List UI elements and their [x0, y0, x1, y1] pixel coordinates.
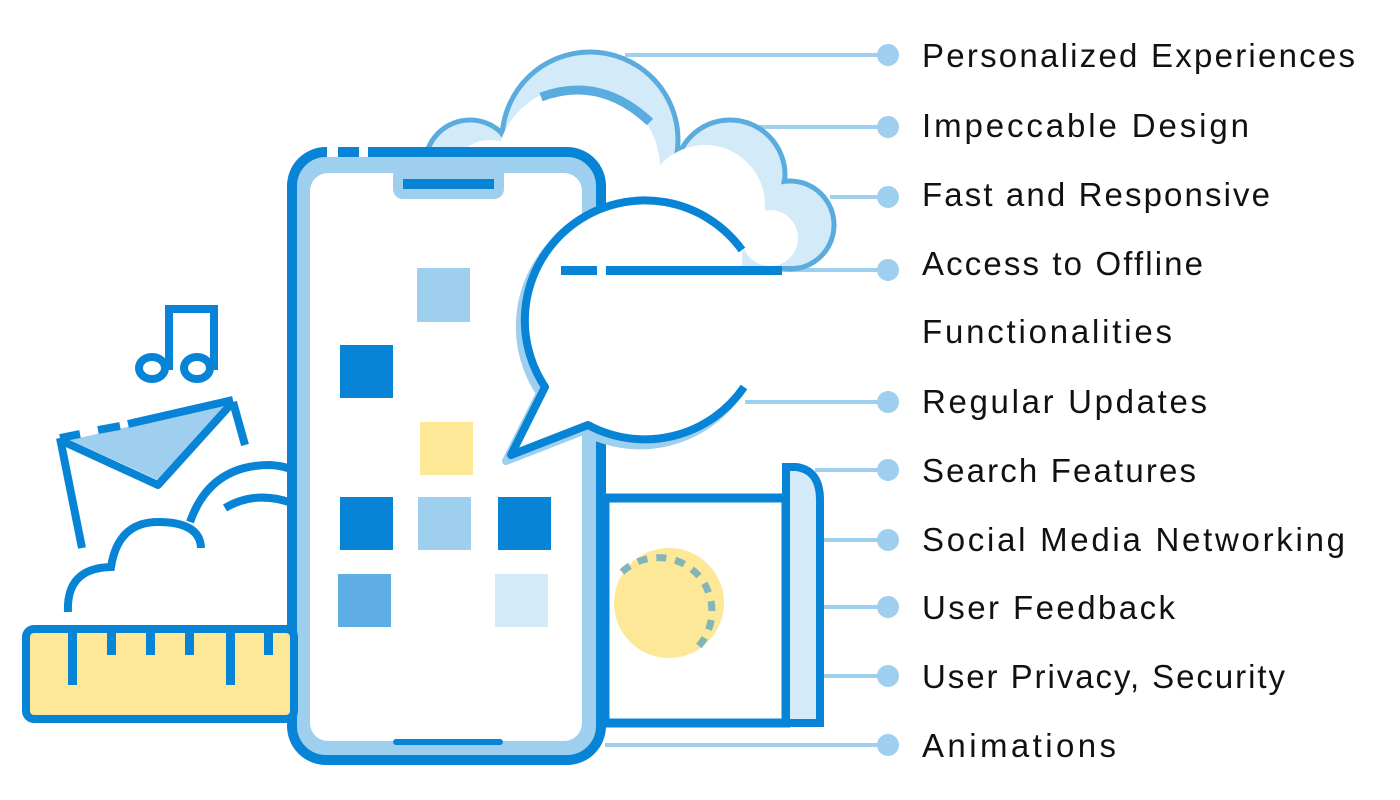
- feature list: Fast and Responsive: [922, 176, 1270, 213]
- feature list: Regular Updates: [922, 383, 1207, 420]
- small cloud: [68, 465, 292, 612]
- feature list: Social Media Networking: [922, 521, 1345, 558]
- feature list: Functionalities: [922, 313, 1172, 350]
- connector lines: [605, 55, 888, 745]
- laptop box: [605, 467, 820, 723]
- ruler: [26, 629, 294, 719]
- app squares: [338, 268, 551, 627]
- phone: [292, 145, 601, 760]
- feature list: User Privacy, Security: [922, 658, 1286, 695]
- feature list: Access to Offline: [922, 245, 1203, 282]
- feature list: Impeccable Design: [922, 107, 1249, 144]
- speech bubble: [506, 200, 782, 461]
- envelope icon: [60, 400, 245, 548]
- notch: [393, 165, 504, 199]
- feature list: Personalized Experiences: [922, 37, 1355, 74]
- music note icon: [139, 309, 214, 379]
- feature list: [877, 37, 1355, 764]
- big cloud: [425, 52, 834, 269]
- feature list: Search Features: [922, 452, 1196, 489]
- feature list: User Feedback: [922, 589, 1176, 626]
- feature list: Animations: [922, 727, 1116, 764]
